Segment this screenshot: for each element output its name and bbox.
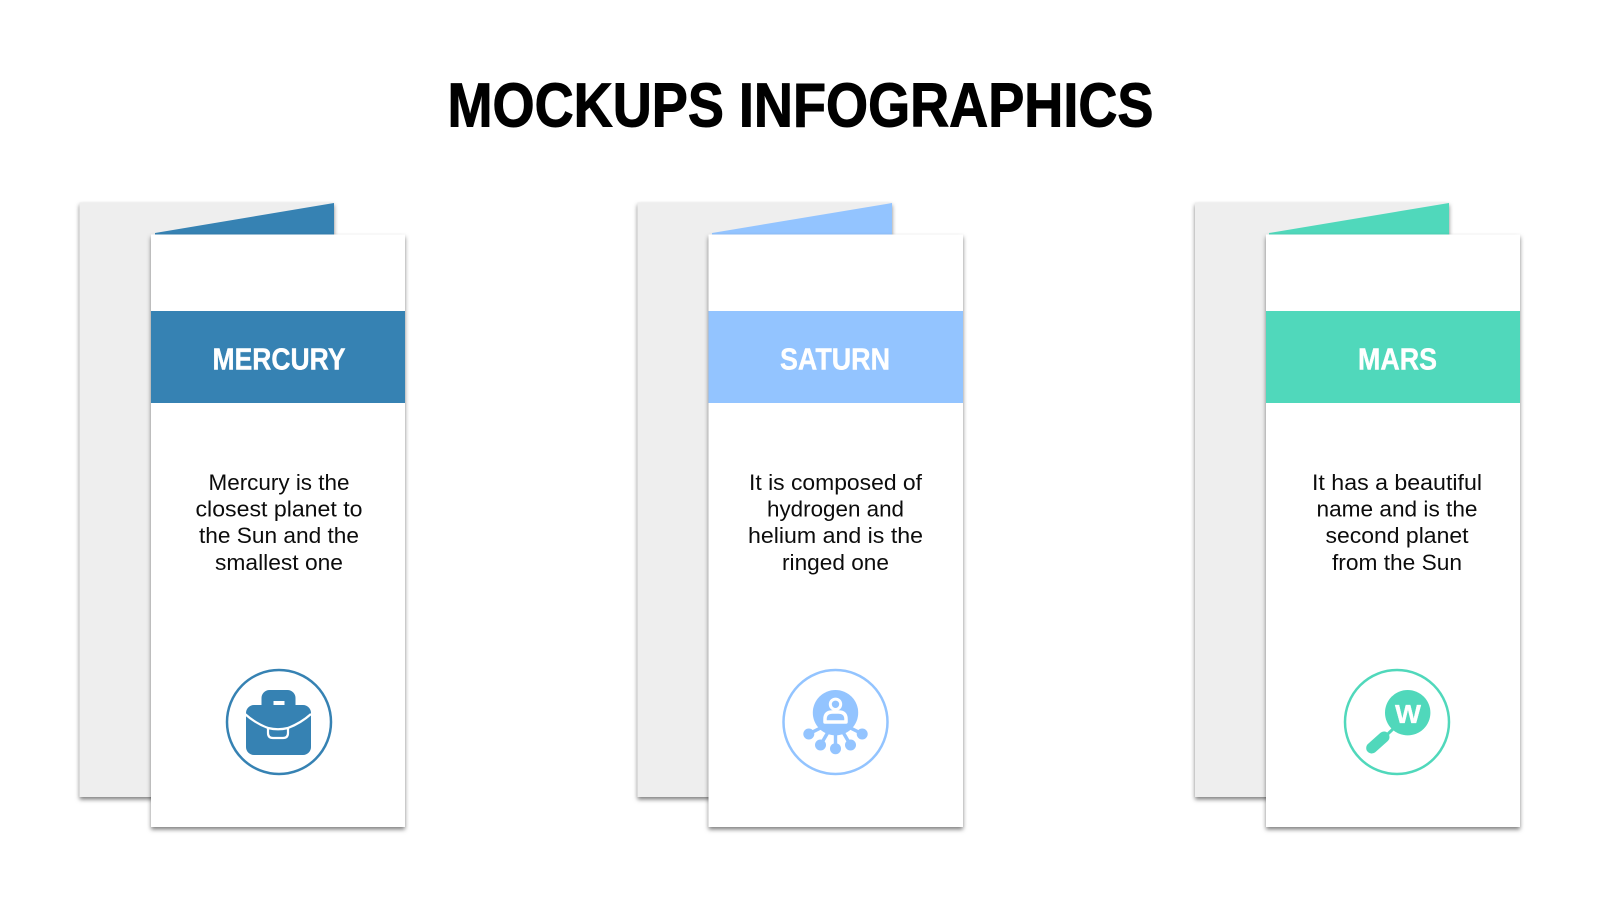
heading: mercury: MERCURY bbox=[212, 342, 346, 376]
icon: magnifier with W: W bbox=[1395, 699, 1421, 729]
text block: mars description: second planet bbox=[1326, 523, 1468, 548]
text block: saturn description bbox=[748, 470, 923, 575]
text block: mars description: name and is the bbox=[1316, 497, 1478, 522]
back page bbox=[80, 202, 334, 797]
header band bbox=[708, 311, 963, 403]
title: MOCKUPS INFOGRAPHICS bbox=[448, 70, 1154, 140]
front page bbox=[1266, 234, 1520, 827]
text block: mercury description: Mercury is the bbox=[208, 470, 350, 495]
icon: briefcase bbox=[227, 670, 331, 774]
icon: magnifier with W bbox=[1345, 670, 1449, 774]
text block: mercury description: the Sun and the bbox=[199, 523, 359, 548]
folded flap bbox=[712, 203, 892, 235]
back page bbox=[1195, 202, 1449, 797]
folded flap bbox=[1269, 203, 1449, 235]
text block: saturn description: helium and is the bbox=[748, 523, 923, 548]
panel: saturn mockup bbox=[638, 202, 963, 827]
front page bbox=[708, 234, 963, 827]
icon: user network bbox=[784, 670, 888, 774]
text block: mercury description bbox=[196, 470, 362, 575]
text block: mars description: from the Sun bbox=[1332, 550, 1462, 575]
text block: mercury description: closest planet to bbox=[196, 497, 362, 522]
header band bbox=[151, 311, 405, 403]
text block: saturn description: It is composed of bbox=[749, 470, 923, 495]
heading: saturn: SATURN bbox=[780, 342, 890, 376]
back page bbox=[638, 202, 892, 797]
front page bbox=[151, 234, 405, 827]
header band bbox=[1266, 311, 1520, 403]
panel: mercury mockup bbox=[80, 202, 405, 827]
heading: mars: MARS bbox=[1358, 342, 1437, 376]
text block: saturn description: hydrogen and bbox=[767, 497, 904, 522]
text block: mars description bbox=[1312, 470, 1482, 575]
text block: saturn description: ringed one bbox=[782, 550, 889, 575]
text block: mars description: It has a beautiful bbox=[1312, 470, 1482, 495]
text block: mercury description: smallest one bbox=[215, 550, 343, 575]
panel: mars mockup bbox=[1195, 202, 1520, 827]
folded flap bbox=[155, 203, 334, 235]
